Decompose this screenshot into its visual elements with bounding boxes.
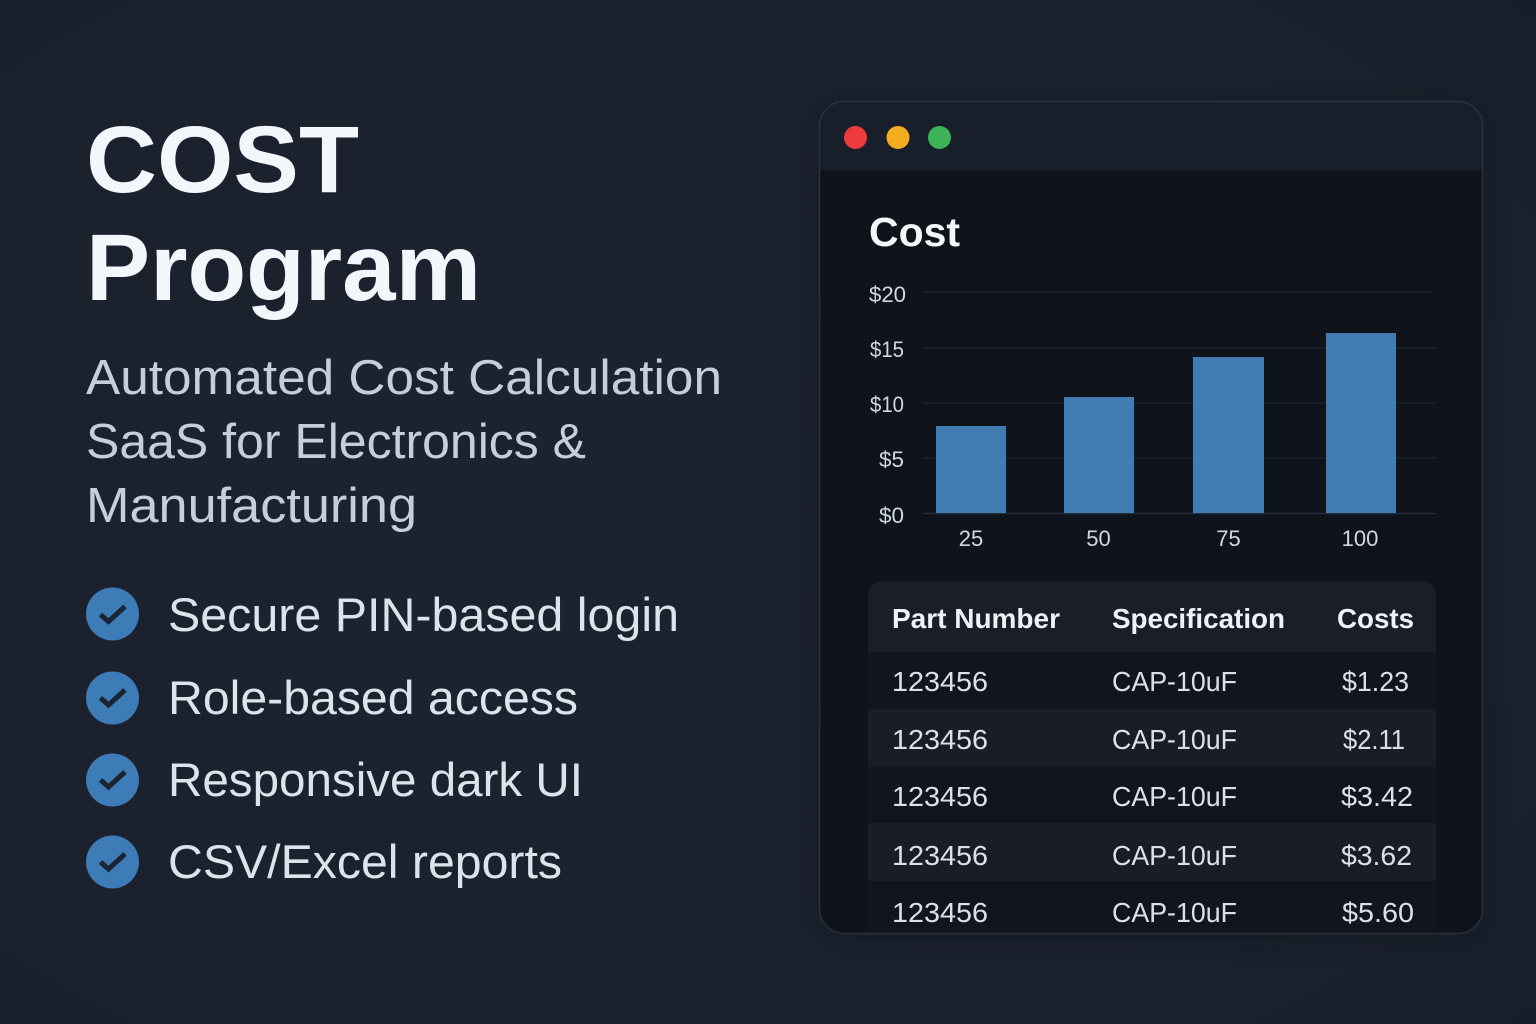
cost table [868,582,1436,933]
feature list [86,588,679,888]
table rows: CAP-10uF [1112,666,1237,697]
chart heading: Cost [869,209,960,255]
title: Program [86,215,481,321]
feature: secure login: Secure PIN-based login [168,588,679,641]
bar chart: 25 [959,526,983,551]
bar chart: $15 [870,337,904,362]
table rows: $2.11 [1343,724,1405,755]
bar chart: $5 [879,447,904,472]
table header: Part Number [892,603,1060,634]
table rows: CAP-10uF [1112,724,1237,755]
table rows [892,666,1414,928]
subtitle: Automated Cost Calculation [86,351,722,405]
table rows: 123456 [892,840,988,871]
app window [820,102,1482,936]
table rows: $3.42 [1341,781,1413,812]
bar chart: 100 [1342,526,1378,551]
bar chart: $20 [869,282,906,307]
feature: role access: Role-based access [168,671,578,724]
bar chart: $10 [870,392,904,417]
table rows: 123456 [892,724,988,755]
feature: dark UI: Responsive dark UI [168,753,583,806]
table rows: CAP-10uF [1112,897,1237,928]
title [86,107,481,321]
table header: Specification [1112,603,1285,634]
table rows: 123456 [892,781,988,812]
table header: Costs [1337,603,1414,634]
table rows: CAP-10uF [1112,840,1237,871]
title: COST [86,107,359,213]
table rows: $5.60 [1342,897,1414,928]
subtitle: Manufacturing [86,479,417,533]
bar chart: $0 [879,503,904,528]
subtitle: SaaS for Electronics & [86,415,586,469]
window controls [844,126,951,149]
table rows: $1.23 [1342,666,1409,697]
feature: reports: CSV/Excel reports [168,835,562,888]
table rows: $3.62 [1341,840,1412,871]
table rows: 123456 [892,897,988,928]
subtitle [86,351,722,533]
bar chart [869,282,1436,551]
table rows: CAP-10uF [1112,781,1237,812]
bar chart: 50 [1086,526,1111,551]
table rows: 123456 [892,666,988,697]
window title bar [820,102,1482,170]
table header [868,582,1436,652]
bar chart: 75 [1216,526,1241,551]
